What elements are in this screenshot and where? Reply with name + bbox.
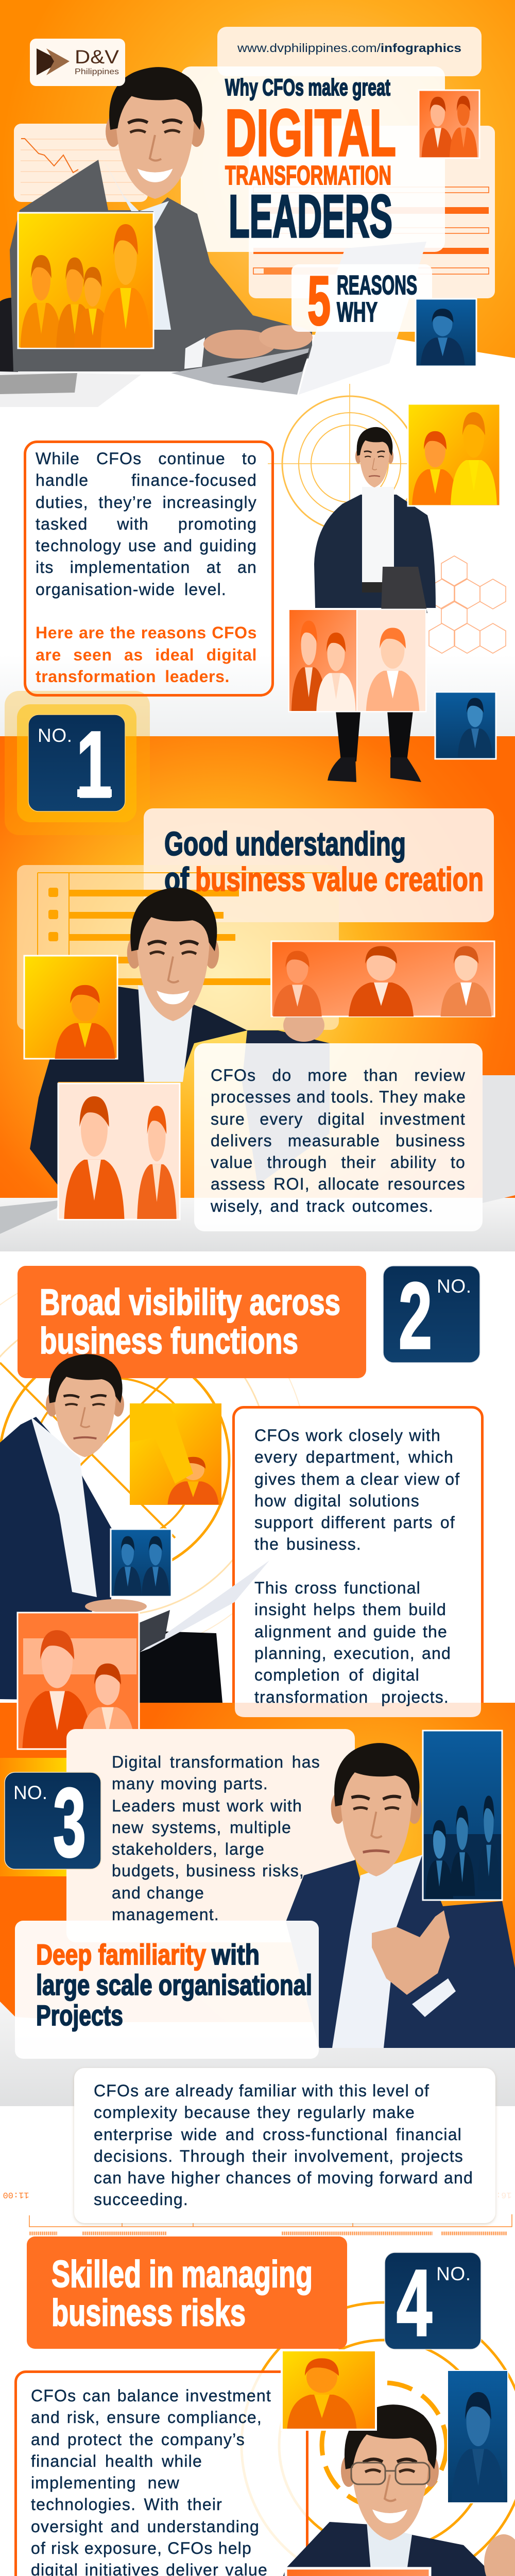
photo: orange tablet [58, 1083, 180, 1219]
section 2 body text: This cross functional [254, 1579, 421, 1597]
photo: orange colleagues [18, 1613, 139, 1749]
section 2 text box [234, 1408, 482, 1718]
hero laptop [171, 242, 426, 395]
section 2 body text: gives them a clear view of [254, 1470, 460, 1488]
section 3 heading [36, 1938, 312, 2031]
section 2 box overlap [235, 1703, 481, 1717]
section 2 body text: transformation projects. [254, 1688, 449, 1706]
intro outlined box text: technology use and guiding [36, 536, 257, 555]
badge glow [5, 691, 150, 835]
section 3 intro text: new systems, multiple [112, 1818, 291, 1837]
desk papers [0, 371, 141, 407]
section 1 heading: Good understanding [164, 825, 406, 862]
section 3 body text: complexity because they regularly make [94, 2103, 415, 2122]
section 1 body text: CFOs do more than review [211, 1066, 466, 1084]
photo: yellow team [18, 213, 153, 348]
white section 4 background [0, 2106, 515, 2576]
section 2 body text: every department, which [254, 1448, 454, 1466]
website URL: www.dvphilippines.com/ infographics [237, 41, 461, 55]
section 2 body text: planning, execution, and [254, 1644, 451, 1663]
URL pill [217, 27, 482, 76]
section 3 body text: CFOs are already familiar with this level of [94, 2081, 430, 2100]
section 4 heading [52, 2253, 313, 2334]
intro outlined box text: While CFOs continue to [36, 449, 257, 468]
section 2 orange band [0, 1703, 515, 2022]
badge no 1: 1 [76, 711, 112, 817]
intro outlined box text: its implementation at an [36, 558, 257, 577]
section 3 intro text: stakeholders, large [112, 1840, 265, 1858]
section 2 body text: insight helps them build [254, 1600, 447, 1619]
title card [181, 66, 445, 252]
section 3 intro text: and change [112, 1884, 204, 1902]
section 1 body text: assess ROI, allocate resources [211, 1175, 466, 1193]
section 1 chart card [17, 865, 340, 1030]
section 4 body text [31, 2386, 271, 2576]
section 3 heading: large scale organisational [36, 1969, 312, 2001]
chair [0, 297, 18, 374]
photo: blue desk worker [435, 692, 496, 759]
section 3 body text: decisions. Through their involvement, projects [94, 2147, 464, 2165]
intro outlined box text: duties, they’re increasingly [36, 493, 257, 512]
section 2 rings [0, 1267, 307, 1654]
section 2 body text: support different parts of [254, 1513, 455, 1532]
intro outlined box text [24, 440, 274, 697]
section 1 text card [194, 1043, 483, 1231]
section 3 intro text [112, 1753, 320, 1924]
section 4 heading card [27, 2236, 347, 2349]
excited man [30, 888, 330, 1185]
card: five reasons: 5 [307, 262, 331, 340]
intro outlined box text: are seen as ideal digital [36, 646, 257, 664]
section 4 body text: financial health while [31, 2452, 202, 2470]
section 1 body text [210, 1066, 466, 1215]
section 2 heading card [18, 1266, 366, 1378]
section 3 intro text: Leaders must work with [112, 1797, 302, 1815]
section 4 body text: and risk, ensure compliance, [31, 2408, 262, 2427]
section 1 orange band [0, 736, 515, 1200]
badge no 4: NO. [436, 2263, 471, 2284]
intro outlined box text: tasked with promoting [36, 515, 257, 533]
badge no 1 [28, 711, 125, 817]
card: five reasons: WHY [337, 297, 377, 328]
photo: blue meeting [416, 299, 476, 366]
section 3 body text [94, 2081, 473, 2209]
section 4 rings [242, 2302, 515, 2576]
section 1 body text: processes and tools. They make [211, 1088, 466, 1106]
badge no 3: NO. [13, 1782, 47, 1803]
section 1 heading card [144, 808, 494, 922]
main title [225, 74, 396, 250]
section 4 heading: business risks [52, 2292, 246, 2334]
section 3 intro text: management. [112, 1905, 219, 1924]
hexagon pattern [429, 556, 506, 653]
man with laptop [0, 1354, 269, 1703]
photo: blue worried woman [448, 2370, 508, 2503]
bars card [249, 126, 495, 298]
section 3 heading: with [211, 1938, 260, 1971]
section 4 body text: technologies. With their [31, 2495, 222, 2514]
timeline chart remnant: 16:00 [485, 2190, 512, 2199]
section 3 body text: succeeding. [94, 2190, 188, 2209]
section 1 body text: value through their ability to [211, 1153, 466, 1172]
badge no 3: 3 [53, 1768, 86, 1877]
intro outlined box text: transformation leaders. [36, 667, 230, 686]
section 2 heading: Broad visibility across [40, 1282, 340, 1323]
section 2 body text: the business. [254, 1535, 362, 1553]
table surface [0, 330, 515, 736]
main title: TRANSFORMATION [225, 161, 391, 191]
timeline chart remnant [3, 2190, 512, 2233]
hero man [10, 67, 313, 371]
main title: Why CFOs make great [225, 74, 390, 100]
section 4 body text: and protect the company’s [31, 2430, 245, 2449]
badge glow 3 [0, 1758, 66, 1876]
photo: orange two panel [289, 609, 426, 711]
badge no 2: 2 [399, 1263, 432, 1368]
section 1 body text: delivers measurable business [211, 1131, 466, 1150]
section 1 body text: sure every digital investment [211, 1110, 466, 1128]
section 2 body text: alignment and guide the [254, 1622, 448, 1641]
section 4 body text: of risk exposure, CFOs help [31, 2539, 252, 2557]
card: five reasons [291, 262, 432, 340]
intro outlined box text: Here are the reasons CFOs [36, 623, 257, 642]
smiling man [243, 2404, 515, 2576]
section 3 intro text: Digital transformation has [112, 1753, 320, 1771]
intro outlined box text: handle finance-focused [36, 471, 257, 489]
photo: yellow stress [282, 2350, 376, 2430]
photo: handshake [419, 90, 479, 158]
photo: blue boardroom [423, 1731, 502, 1900]
photo: yellow colleagues [408, 404, 500, 506]
badge no 1: NO. [38, 725, 72, 746]
section 3 pale card [66, 1729, 355, 1942]
section 4 text box [15, 2372, 307, 2576]
section 3 text card [74, 2068, 495, 2223]
timeline chart remnant: 11:00 [3, 2190, 29, 2199]
section 1 desk [0, 1075, 515, 1251]
photo: orange team review [271, 941, 494, 1016]
section 2 heading [40, 1282, 340, 1362]
section 2 body text: CFOs work closely with [254, 1426, 441, 1445]
section 2 body text: how digital solutions [254, 1492, 420, 1510]
badge no 4 [385, 2250, 481, 2355]
gesturing man [286, 1743, 515, 2048]
main title: LEADERS [229, 182, 392, 250]
hero background [0, 0, 515, 392]
section 4 body text: implementing new [31, 2473, 180, 2492]
logo card [30, 39, 125, 86]
intro outlined box text: organisation-wide level. [36, 580, 227, 599]
logo card: Philippines [75, 67, 119, 76]
badge no 2: NO. [437, 1276, 471, 1297]
chart card [14, 124, 148, 202]
section 3 heading card [15, 1921, 319, 2059]
photo: yellow coworkers [24, 956, 117, 1059]
section 3 desk [0, 2002, 515, 2106]
section 3 intro text: budgets, business risks, [112, 1861, 304, 1880]
section 3 intro text: many moving parts. [112, 1774, 268, 1793]
photo: yellow reviewer [130, 1403, 221, 1505]
logo card: D&V [75, 46, 119, 67]
target rings [268, 384, 417, 531]
section 2 heading: business functions [40, 1321, 298, 1362]
badge no 3 [5, 1768, 101, 1877]
photo: orange worried woman [286, 2568, 430, 2576]
section 1 body text: wisely, and track outcomes. [211, 1197, 434, 1215]
section 4 heading: Skilled in managing [52, 2253, 313, 2295]
section 4 body text: CFOs can balance investment [31, 2386, 271, 2405]
section 3 body text: enterprise wide and cross-functional financial [94, 2125, 462, 2144]
section 1 heading: of [164, 860, 189, 898]
standing man [314, 427, 436, 782]
section 4 body text: oversight and understanding [31, 2517, 260, 2536]
timeline chart remnant: Nov-13 [321, 2190, 353, 2199]
badge no 4: 4 [397, 2250, 432, 2355]
card: five reasons: REASONS [337, 270, 417, 300]
badge no 2 [383, 1263, 480, 1368]
section 3 body text: can have higher chances of moving forward and [94, 2168, 473, 2187]
section 1 heading [164, 825, 484, 898]
section 2 body text: completion of digital [254, 1666, 420, 1684]
main title: DIGITAL [225, 96, 396, 170]
section 3 heading: Deep familiarity [36, 1938, 206, 1971]
photo: blue pair [111, 1529, 171, 1597]
section 2 body text [254, 1426, 460, 1706]
section 3 heading: Projects [36, 1999, 123, 2031]
